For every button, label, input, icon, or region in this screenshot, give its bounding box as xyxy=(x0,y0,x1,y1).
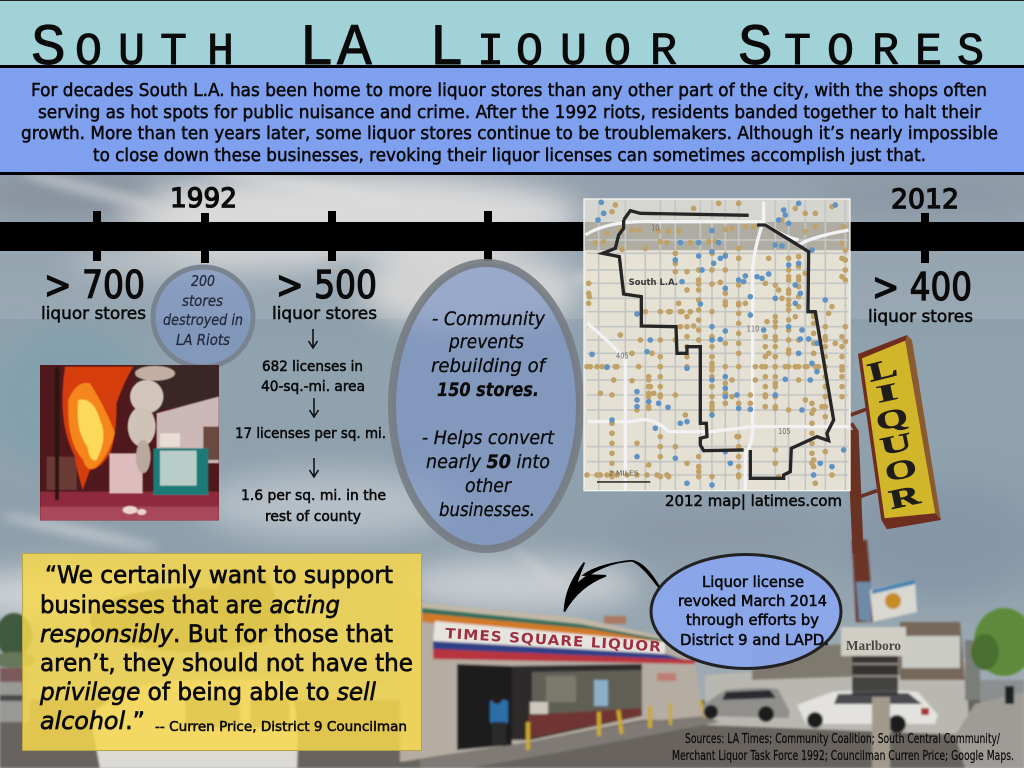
ellipse: community action: nearly 50 into xyxy=(426,451,550,473)
stat: more than 400 xyxy=(868,265,973,326)
liquor sign xyxy=(858,335,941,529)
background photo: street view of liquor store xyxy=(0,159,1024,768)
quote box: alcohol.” xyxy=(40,707,145,735)
liquor sign: L xyxy=(865,352,900,388)
South LA boundary xyxy=(603,211,834,478)
quote box: “We certainly want to support xyxy=(45,561,393,589)
year 1992: 1992 xyxy=(170,183,237,214)
stat: more than 500 with density breakdown: 1.6 per sq. mi. in the xyxy=(241,488,386,504)
intro panel: For decades South L.A. has been home to more liquor stores than any other part of the city, with the shops often xyxy=(31,80,987,101)
stat: more than 500 with density breakdown: liquor stores xyxy=(272,304,377,323)
circle: 200 stores destroyed: destroyed in xyxy=(163,311,243,329)
map of liquor stores in South LA: 110 xyxy=(747,324,759,333)
title: S xyxy=(31,17,66,82)
liquor sign: U xyxy=(877,427,914,461)
arrow pointing to store xyxy=(564,561,661,612)
callout: license revoked: District 9 and LAPD. xyxy=(680,631,829,649)
photo: store on fire in riots xyxy=(40,365,219,521)
stat: more than 500 with density breakdown: 682 licenses in xyxy=(262,359,363,375)
year 2012: 2012 xyxy=(891,184,959,215)
quote box: businesses that are acting xyxy=(40,591,340,619)
ellipse: community action: other xyxy=(465,475,512,497)
callout: license revoked: Liquor license xyxy=(702,573,804,591)
map of liquor stores in South LA: 10 xyxy=(651,224,659,233)
title: S xyxy=(738,17,773,82)
callout: license revoked: through efforts by xyxy=(686,611,819,629)
ellipse: community action xyxy=(392,263,580,549)
map of liquor stores in South LA: 105 xyxy=(778,427,791,436)
stat: more than 500 with density breakdown: > 500 xyxy=(276,263,377,307)
circle: 200 stores destroyed xyxy=(153,267,253,367)
title: IQUOR xyxy=(477,27,677,78)
map of liquor stores in South LA xyxy=(584,199,850,491)
map labels: South L.A. xyxy=(629,278,678,288)
tan store dots xyxy=(589,203,845,483)
ellipse: community action: rebuilding of xyxy=(431,355,548,377)
title: OUTH xyxy=(75,27,234,78)
ellipse: community action: prevents xyxy=(448,331,524,353)
callout: license revoked xyxy=(651,554,841,668)
circle: 200 stores destroyed: 200 xyxy=(191,272,215,290)
callout: license revoked: revoked March 2014 xyxy=(678,592,827,610)
quote box: responsibly. But for those that xyxy=(40,620,393,648)
stat: more than 500 with density breakdown: 17 licenses per sq. mi. xyxy=(235,426,386,442)
map streets xyxy=(587,200,849,490)
title: LA xyxy=(299,17,372,82)
stat: more than 500 with density breakdown xyxy=(235,263,386,525)
storefront sign lettering: TIMES SQUARE LIQUOR xyxy=(445,626,662,656)
title xyxy=(31,17,984,82)
map freeways xyxy=(585,202,849,490)
map of liquor stores in South LA: 405 xyxy=(616,352,629,361)
circle: 200 stores destroyed: LA Riots xyxy=(176,331,230,349)
liquor sign: I xyxy=(874,378,900,408)
blue store dots xyxy=(592,202,844,485)
stat: more than 700 xyxy=(41,263,146,323)
liquor sign: O xyxy=(882,453,920,488)
liquor sign: Q xyxy=(873,402,910,437)
stat: more than 700: > 700 xyxy=(44,263,145,307)
marlboro sign lettering: Marlboro xyxy=(846,639,901,654)
ellipse: community action: - Helps convert xyxy=(422,427,555,449)
ellipse: community action: businesses. xyxy=(439,499,535,521)
header band xyxy=(0,0,1024,68)
title: L xyxy=(429,17,464,82)
quote box xyxy=(22,554,422,750)
sources xyxy=(672,732,1014,764)
ellipse: community action: 150 stores. xyxy=(437,379,539,401)
title: TORES xyxy=(784,27,984,78)
quote box: privilege of being able to sell xyxy=(39,678,376,706)
map caption: 2012 map| latimes.com xyxy=(665,492,842,510)
quote box: -- Curren Price, District 9 Councilman xyxy=(155,719,407,735)
extra tan store dots along streets xyxy=(587,250,845,487)
timeline bar with ticks xyxy=(0,211,1024,263)
intro panel: to close down these businesses, revoking their liquor licenses can sometimes accomplish just that. xyxy=(93,145,926,166)
circle: 200 stores destroyed: stores xyxy=(182,292,223,310)
stat: more than 500 with density breakdown: 40-sq.-mi. area xyxy=(261,379,365,395)
liquor sign: R xyxy=(886,479,924,515)
map of liquor stores in South LA: 2 MILES xyxy=(609,469,639,477)
quote box: aren’t, they should not have the xyxy=(40,649,413,677)
stat: more than 700: liquor stores xyxy=(41,304,146,323)
liquor sign pole xyxy=(847,409,877,554)
intro panel: serving as hot spots for public nuisance and crime. After the 1992 riots, residents banded together to halt their xyxy=(38,102,982,123)
stat: more than 500 with density breakdown: rest of county xyxy=(265,509,361,525)
stat: more than 400: liquor stores xyxy=(868,307,973,326)
ellipse: community action: - Community xyxy=(432,308,546,330)
stat: more than 400: > 400 xyxy=(872,265,972,309)
intro panel xyxy=(0,68,1024,175)
